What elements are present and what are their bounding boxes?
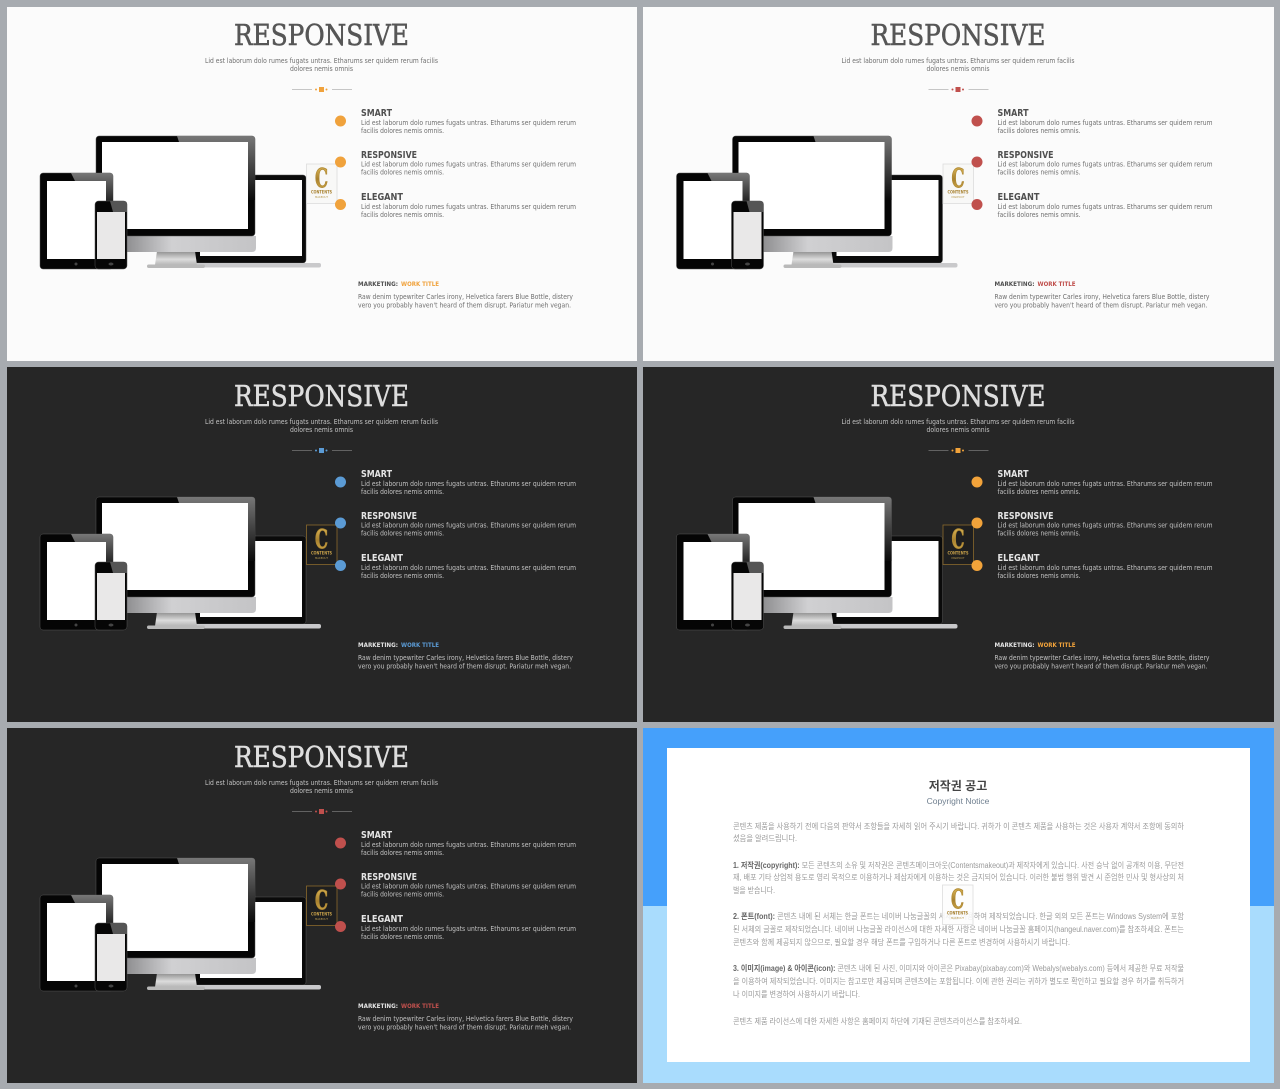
subtitle <box>205 57 438 73</box>
feature: smart <box>972 469 1213 496</box>
logo badge <box>306 886 337 926</box>
feature: responsive: facilis dolores nemis omnis. <box>361 168 444 176</box>
logo badge: MAKEOUT <box>315 195 328 199</box>
divider ornament <box>292 809 352 814</box>
feature: elegant <box>335 914 576 941</box>
feature: elegant: ELEGANT <box>361 914 403 925</box>
feature: elegant: ELEGANT <box>998 192 1040 203</box>
feature: responsive: facilis dolores nemis omnis. <box>361 890 444 898</box>
logo badge: C <box>315 525 328 555</box>
subtitle: Lid est laborum dolo rumes fugats untras. Etharums ser quidem rerum facilis <box>205 779 438 787</box>
feature: smart: facilis dolores nemis omnis. <box>361 849 444 857</box>
section: copyright: 1. 저작권(copyright): 모든 콘텐츠의 소유 및 저작권은 콘텐츠메이크아웃(Contentsmakeout)과 제작자에게 있습니다. 사전 승낙 없이 공개적 이용, 무단전 <box>733 860 1184 870</box>
feature: elegant <box>335 192 576 219</box>
section: copyright: 재, 배포 기타 상업적 용도로 영리 목적으로 이용하거나 제삼자에게 이용하는 것은 금지되어 있습니다. 이러한 불법 행위 발견 시 준엄한 민사 및 형사상의 처 <box>733 872 1184 882</box>
feature: responsive: Lid est laborum dolo rumes fugats untras. Etharums ser quidem rerum <box>361 522 576 530</box>
feature: smart: Lid est laborum dolo rumes fugats untras. Etharums ser quidem rerum <box>361 841 576 849</box>
feature: smart: facilis dolores nemis omnis. <box>361 488 444 496</box>
logo badge <box>306 164 337 204</box>
feature: smart: SMART <box>361 469 392 480</box>
marketing text block: vero you probably haven't heard of them disrupt. Pariatur meh vegan. <box>994 302 1208 310</box>
logo badge <box>943 525 974 564</box>
marketing text block: vero you probably haven't heard of them disrupt. Pariatur meh vegan. <box>358 302 571 310</box>
intro paragraph: 셨음을 알려드립니다. <box>733 833 797 843</box>
feature: smart: SMART <box>361 108 392 119</box>
subtitle <box>205 418 438 434</box>
marketing text block <box>358 642 573 670</box>
subtitle: dolores nemis omnis <box>290 426 353 434</box>
marketing text block: MARKETING: <box>358 642 398 649</box>
feature: smart: Lid est laborum dolo rumes fugats untras. Etharums ser quidem rerum <box>361 119 576 127</box>
feature: elegant: ELEGANT <box>998 553 1040 564</box>
copyright title: 저작권 공고 <box>929 778 987 793</box>
marketing text block: WORK TITLE <box>1038 642 1076 649</box>
device mockups <box>676 497 958 630</box>
section: font: 콘텐츠와 함께 제공되지 않으므로, 필요할 경우 해당 폰트를 구입하거나 다른 폰트로 변경하여 사용하시기 바랍니다. <box>733 937 1070 947</box>
logo badge: C <box>315 164 328 194</box>
device mockups <box>40 136 321 269</box>
feature: responsive <box>335 872 576 898</box>
subtitle: dolores nemis omnis <box>926 65 990 73</box>
feature: responsive: RESPONSIVE <box>361 511 417 522</box>
feature: elegant: Lid est laborum dolo rumes fugats untras. Etharums ser quidem rerum <box>998 203 1213 211</box>
feature: responsive <box>335 150 576 176</box>
logo badge: CONTENTS <box>311 190 332 196</box>
intro paragraph: 콘텐츠 제품을 사용하기 전에 다음의 판약서 조항들을 자세히 읽어 주시기 바랍니다. 귀하가 이 콘텐츠 제품을 사용하는 것은 사용자 계약서 조항에 동의하 <box>733 821 1185 831</box>
section: image and icon: 을 이용하여 제작되었습니다. 이미지는 참고로만 제공되며 콘텐츠에는 포함됩니다. 이에 관한 권리는 귀하가 별도로 확인하고 필요할 경우 허가를 취득하거 <box>733 976 1184 986</box>
logo badge <box>306 525 337 564</box>
section: image and icon: 나 이미지를 변경하여 사용하시기 바랍니다. <box>733 989 860 999</box>
feature: smart: SMART <box>361 830 392 841</box>
feature: responsive: Lid est laborum dolo rumes fugats untras. Etharums ser quidem rerum <box>361 882 576 890</box>
feature: elegant: facilis dolores nemis omnis. <box>361 572 444 580</box>
feature: smart: facilis dolores nemis omnis. <box>361 127 444 135</box>
feature: responsive: Lid est laborum dolo rumes fugats untras. Etharums ser quidem rerum <box>998 522 1213 530</box>
subtitle: Lid est laborum dolo rumes fugats untras. Etharums ser quidem rerum facilis <box>205 418 438 426</box>
subtitle <box>205 779 438 795</box>
panel: copyright notice <box>643 728 1274 1083</box>
logo badge overlay: CONTENTS <box>947 910 968 916</box>
feature: smart <box>335 469 576 496</box>
feature: responsive: RESPONSIVE <box>361 150 417 161</box>
heading: RESPONSIVE <box>870 18 1046 52</box>
heading: RESPONSIVE <box>234 18 409 52</box>
feature: responsive <box>972 150 1213 176</box>
logo badge overlay: MAKEOUT <box>951 916 964 920</box>
logo badge: C <box>952 525 964 555</box>
feature: elegant: facilis dolores nemis omnis. <box>361 211 444 219</box>
logo badge: MAKEOUT <box>952 556 965 560</box>
section: image and icon <box>733 963 1184 999</box>
section: copyright <box>733 860 1184 895</box>
logo badge <box>943 164 974 204</box>
feature: smart: Lid est laborum dolo rumes fugats untras. Etharums ser quidem rerum <box>998 119 1213 127</box>
copyright subtitle: Copyright Notice <box>927 796 990 806</box>
feature: elegant <box>335 553 576 580</box>
feature: responsive: facilis dolores nemis omnis. <box>361 530 444 538</box>
marketing text block: WORK TITLE <box>401 281 439 288</box>
logo badge: MAKEOUT <box>952 195 965 199</box>
feature: elegant: ELEGANT <box>361 192 403 203</box>
feature: smart <box>335 830 576 857</box>
feature: elegant: Lid est laborum dolo rumes fugats untras. Etharums ser quidem rerum <box>361 203 576 211</box>
section: image and icon: 3. 이미지(image) & 아이콘(icon): 콘텐츠 내에 된 사진, 이미지와 아이콘은 Pixabay(pixabay.com)와 Webalys(webalys.com) 등에서 제공한 무료 저작물 <box>733 963 1184 973</box>
device mockups <box>40 858 321 991</box>
marketing text block <box>994 642 1210 670</box>
subtitle: Lid est laborum dolo rumes fugats untras. Etharums ser quidem rerum facilis <box>842 418 1075 426</box>
feature: responsive: facilis dolores nemis omnis. <box>998 168 1080 176</box>
feature: elegant: Lid est laborum dolo rumes fugats untras. Etharums ser quidem rerum <box>998 564 1213 572</box>
subtitle: dolores nemis omnis <box>290 65 353 73</box>
marketing text block: WORK TITLE <box>1038 281 1076 288</box>
heading: RESPONSIVE <box>870 379 1046 413</box>
feature: responsive: Lid est laborum dolo rumes fugats untras. Etharums ser quidem rerum <box>361 160 576 168</box>
feature: smart <box>972 108 1213 135</box>
intro paragraph <box>733 821 1185 843</box>
feature: responsive: facilis dolores nemis omnis. <box>998 530 1080 538</box>
heading: RESPONSIVE <box>234 740 409 774</box>
subtitle: Lid est laborum dolo rumes fugats untras. Etharums ser quidem rerum facilis <box>842 57 1075 65</box>
closing line: 콘텐츠 제품 라이선스에 대한 자세한 사항은 홈페이지 하단에 기재된 콘텐츠라이선스를 참조하세요. <box>733 1016 1022 1026</box>
feature: responsive: RESPONSIVE <box>361 872 417 883</box>
marketing text block: Raw denim typewriter Carles irony, Helvetica farers Blue Bottle, distery <box>358 654 573 662</box>
marketing text block: WORK TITLE <box>401 1003 439 1010</box>
feature: smart <box>335 108 576 135</box>
feature: responsive <box>972 511 1213 538</box>
logo badge: MAKEOUT <box>315 556 328 560</box>
panel: dark slide, red accent <box>7 728 637 1083</box>
feature: responsive: RESPONSIVE <box>998 150 1054 161</box>
panel: light slide, orange accent <box>7 7 637 361</box>
feature: elegant: Lid est laborum dolo rumes fugats untras. Etharums ser quidem rerum <box>361 925 576 933</box>
marketing text block: Raw denim typewriter Carles irony, Helvetica farers Blue Bottle, distery <box>994 293 1210 301</box>
logo badge: C <box>315 886 328 916</box>
feature: smart: facilis dolores nemis omnis. <box>998 127 1080 135</box>
marketing text block: vero you probably haven't heard of them disrupt. Pariatur meh vegan. <box>358 1024 571 1032</box>
panel: dark slide, orange accent <box>643 367 1274 722</box>
feature: smart: Lid est laborum dolo rumes fugats untras. Etharums ser quidem rerum <box>998 480 1213 488</box>
feature: smart: facilis dolores nemis omnis. <box>998 488 1080 496</box>
divider ornament <box>292 448 352 453</box>
subtitle <box>842 418 1075 434</box>
feature: elegant <box>972 192 1213 219</box>
feature: smart: Lid est laborum dolo rumes fugats untras. Etharums ser quidem rerum <box>361 480 576 488</box>
feature: elegant: Lid est laborum dolo rumes fugats untras. Etharums ser quidem rerum <box>361 564 576 572</box>
panel: light slide, red accent <box>643 7 1274 361</box>
subtitle: Lid est laborum dolo rumes fugats untras. Etharums ser quidem rerum facilis <box>205 57 438 65</box>
feature: smart: SMART <box>998 469 1029 480</box>
marketing text block <box>358 281 573 310</box>
marketing text block: MARKETING: <box>358 281 398 288</box>
logo badge: C <box>952 164 964 194</box>
marketing text block: Raw denim typewriter Carles irony, Helvetica farers Blue Bottle, distery <box>358 1015 573 1023</box>
logo badge overlay: C <box>951 885 964 915</box>
feature: elegant: ELEGANT <box>361 553 403 564</box>
subtitle: dolores nemis omnis <box>290 787 353 795</box>
logo badge: MAKEOUT <box>315 917 328 921</box>
marketing text block: MARKETING: <box>358 1003 398 1010</box>
logo badge overlay <box>942 885 973 924</box>
heading: RESPONSIVE <box>234 379 409 413</box>
section: font: 된 서체의 글꼴로 제작되었습니다. 네이버 나눔글꼴 라이선스에 대한 자세한 사항은 네이버 나눔글꼴 홈페이지(hangeul.naver.com)를 참조하세요. 폰트는 <box>733 924 1184 934</box>
logo badge: CONTENTS <box>948 550 968 556</box>
divider ornament <box>928 87 988 92</box>
divider ornament <box>292 87 352 92</box>
logo badge: CONTENTS <box>948 190 968 196</box>
marketing text block <box>994 281 1210 310</box>
marketing text block: vero you probably haven't heard of them disrupt. Pariatur meh vegan. <box>358 662 571 670</box>
device mockups <box>676 136 958 269</box>
marketing text block: MARKETING: <box>994 281 1034 288</box>
feature: responsive: Lid est laborum dolo rumes fugats untras. Etharums ser quidem rerum <box>998 160 1213 168</box>
panel: dark slide, blue accent <box>7 367 637 722</box>
feature: elegant: facilis dolores nemis omnis. <box>998 572 1080 580</box>
section: copyright: 벌을 받습니다. <box>733 885 775 895</box>
section: font: 2. 폰트(font): 콘텐츠 내에 된 서체는 한글 폰트는 네이버 나눔글꼴의 서체를 이용하여 제작되었습니다. 한글 외의 모든 폰트는 Windows System에 포함 <box>733 911 1185 921</box>
logo badge: CONTENTS <box>311 550 332 556</box>
section: font <box>733 911 1185 947</box>
subtitle: dolores nemis omnis <box>926 426 990 434</box>
subtitle <box>842 57 1075 73</box>
marketing text block: vero you probably haven't heard of them disrupt. Pariatur meh vegan. <box>994 662 1208 670</box>
marketing text block: Raw denim typewriter Carles irony, Helvetica farers Blue Bottle, distery <box>358 293 573 301</box>
feature: smart: SMART <box>998 108 1029 119</box>
feature: responsive: RESPONSIVE <box>998 511 1054 522</box>
marketing text block <box>358 1003 573 1032</box>
device mockups <box>40 497 321 630</box>
feature: responsive <box>335 511 576 538</box>
feature: elegant: facilis dolores nemis omnis. <box>361 933 444 941</box>
feature: elegant: facilis dolores nemis omnis. <box>998 211 1080 219</box>
marketing text block: Raw denim typewriter Carles irony, Helvetica farers Blue Bottle, distery <box>994 654 1210 662</box>
marketing text block: WORK TITLE <box>401 642 439 649</box>
feature: elegant <box>972 553 1213 580</box>
marketing text block: MARKETING: <box>994 642 1034 649</box>
logo badge: CONTENTS <box>311 912 332 918</box>
divider ornament <box>928 448 988 453</box>
